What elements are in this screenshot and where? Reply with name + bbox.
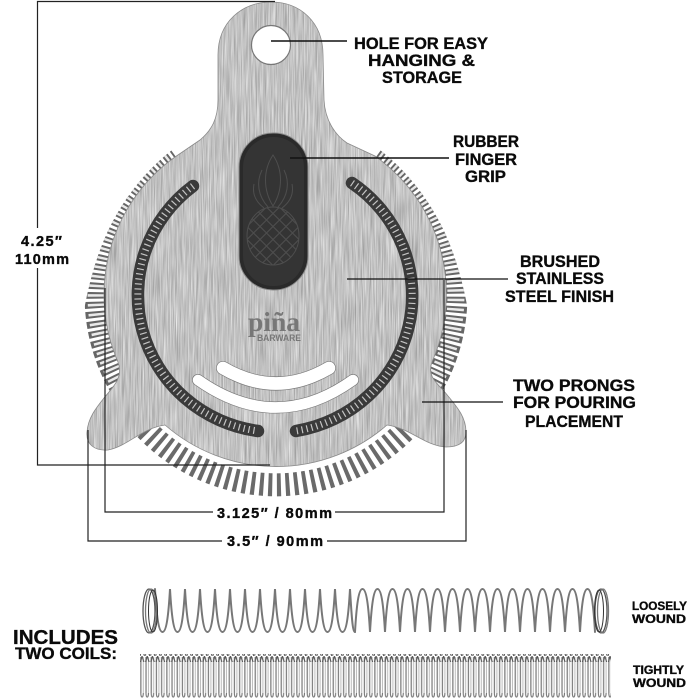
heading: includes two coils [13, 626, 118, 663]
brand logo: piña [248, 307, 300, 337]
rubber finger grip with pineapple [239, 133, 308, 290]
label: tightly wound: WOUND [633, 676, 686, 690]
callout: two prongs [513, 377, 636, 431]
callout: rubber finger grip [453, 133, 519, 186]
callout: brushed finish: STAINLESS [516, 270, 604, 288]
arrow: grip [290, 157, 449, 159]
arrow: finish [347, 278, 508, 280]
callout: hole for hanging: STORAGE [382, 69, 462, 87]
arrow: prongs [422, 401, 503, 403]
dimension: height 4.25 in: 4.25″ [21, 234, 62, 250]
dimension: width 3.125 in [105, 280, 444, 522]
callout: hole for hanging [354, 35, 488, 87]
callout: hole for hanging: HANGING & [368, 52, 475, 70]
dimension: width 3.5 in: 3.5″ / 90mm [227, 534, 323, 550]
left strainer slot [138, 186, 258, 431]
label: tightly wound: TIGHTLY [633, 663, 684, 677]
callout: brushed finish: STEEL FINISH [505, 288, 614, 306]
callout: brushed finish [505, 253, 614, 306]
hanging hole [252, 26, 290, 64]
right strainer slot [296, 183, 412, 431]
callout: rubber finger grip: FINGER [455, 151, 517, 169]
heading: includes two coils: TWO COILS: [15, 645, 117, 663]
strainer spring coil around plate [96, 150, 456, 485]
heading: includes two coils: INCLUDES [13, 626, 118, 649]
callout: two prongs: TWO PRONGS [513, 377, 635, 395]
upper white slot [223, 368, 329, 384]
callout: rubber finger grip: GRIP [465, 168, 506, 186]
brand logo: BARWARE [257, 333, 301, 343]
dimension: height 4.25 in [15, 2, 275, 465]
dimension: width 3.5 in [88, 430, 466, 550]
callout: two prongs: PLACEMENT [525, 413, 623, 431]
label: tightly wound [633, 663, 686, 690]
pineapple leaves [253, 155, 293, 208]
dimension: width 3.125 in: 3.125″ / 80mm [217, 506, 332, 522]
stainless steel plate [87, 2, 466, 467]
callout: hole for hanging: HOLE FOR EASY [354, 35, 488, 53]
dimension: height 4.25 in: 110mm [15, 252, 69, 268]
label: loosely wound: LOOSELY [632, 599, 687, 613]
label: loosely wound: WOUND [632, 612, 686, 626]
callout: brushed finish: BRUSHED [520, 253, 600, 271]
label: loosely wound [632, 599, 687, 626]
arrow: hole [271, 40, 347, 42]
tightly wound coil [140, 654, 611, 698]
loosely wound coil [143, 589, 608, 633]
lower white slot [198, 380, 353, 408]
callout: two prongs: FOR POURING [513, 394, 636, 412]
pineapple body [247, 207, 299, 265]
callout: rubber finger grip: RUBBER [453, 133, 519, 151]
